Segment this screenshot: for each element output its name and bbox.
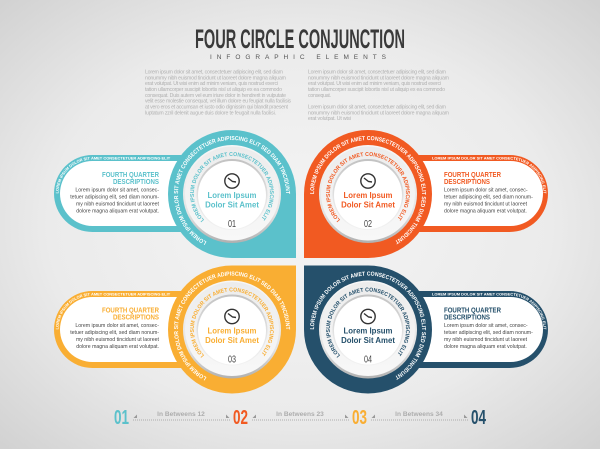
- number: 03: [228, 354, 236, 366]
- pill white interior: [60, 161, 230, 226]
- inner curved label: LOREM IPSUM DOLOR SIT AMET CONSECTETUER ADIPISCING ELIT: [326, 288, 410, 358]
- ring: [183, 145, 281, 243]
- description: my nibh euismod tincidunt ut laoreet: [444, 202, 528, 208]
- step 04: 04: [471, 407, 487, 429]
- heading: DESCRIPTIONS: [113, 312, 159, 322]
- heading: FOURTH QUARTER: [102, 306, 160, 314]
- icon: clock: [361, 309, 375, 324]
- description: dolore magna aliquam erat volutpat.: [444, 208, 527, 214]
- center label: Dolor Sit Amet: [341, 336, 395, 345]
- inner curved label: LOREM IPSUM DOLOR SIT AMET CONSECTETUER ADIPISCING ELIT: [190, 152, 274, 222]
- pill white interior: [60, 297, 230, 362]
- panel: 02 orange: [304, 130, 548, 258]
- title: FOUR CIRCLE CONJUNCTION: [195, 24, 405, 54]
- pill curved label: LOREM IPSUM DOLOR SIT AMET CONSECTETUER ADIPISCING ELIT: [432, 156, 546, 194]
- description: dolore magna aliquam erat volutpat.: [444, 344, 527, 350]
- outer curved label: LOREM IPSUM DOLOR SIT AMET CONSECTETUER ADIPISCING ELIT SED DIAM TINCIDUNT: [174, 136, 290, 245]
- pill: navy: [358, 291, 548, 368]
- heading: [102, 306, 160, 322]
- center label: Lorem Ipsum: [208, 326, 257, 336]
- text block: left intro column: at vero eros et accumsan et iusto odio dignissim qui blandit praesent: [145, 104, 289, 110]
- icon: clock: [225, 174, 239, 188]
- panel: 03 amber: [54, 266, 296, 394]
- icon: clock: [361, 174, 375, 188]
- label 23: In Betweens 23: [276, 411, 324, 418]
- icon: clock: [225, 309, 239, 324]
- text block: right intro column: nonummy nibh euismod tincidunt ut laoreet dolore magna aliquam: [308, 75, 449, 81]
- teardrop shape: [168, 130, 296, 258]
- description: Lorem ipsum dolor sit amet, consec-: [444, 188, 528, 194]
- description: Lorem ipsum dolor sit amet, consec-: [444, 323, 528, 329]
- teardrop shape: [304, 130, 432, 258]
- heading: FOURTH QUARTER: [444, 170, 502, 179]
- label 34: In Betweens 34: [395, 411, 443, 418]
- number: 02: [364, 219, 372, 230]
- ring: [319, 145, 417, 243]
- teardrop shape: [304, 266, 432, 394]
- text block: right intro column: nonummy nibh euismod tincidunt ut laoreet dolore magna aliquam: [308, 110, 449, 116]
- description: tetuer adipiscing elit, sed diam nonum-: [70, 330, 159, 336]
- heading: DESCRIPTIONS: [113, 177, 159, 186]
- text block: left intro column: nonummy nibh euismod tincidunt ut laoreet dolore magna aliquam: [145, 75, 286, 81]
- outer curved label: LOREM IPSUM DOLOR SIT AMET CONSECTETUER ADIPISCING ELIT SED DIAM TINCIDUNT: [310, 136, 426, 244]
- text block: right intro column: Lorem ipsum dolor sit amet, consectetuer adipiscing elit, sed diam: [308, 70, 446, 76]
- outer curved label: LOREM IPSUM DOLOR SIT AMET CONSECTETUER ADIPISCING ELIT SED DIAM TINCIDUNT: [310, 272, 426, 380]
- heading: [444, 306, 502, 322]
- description: my nibh euismod tincidunt ut laoreet: [76, 202, 160, 208]
- text block: right intro column: [308, 70, 449, 122]
- connector 34: [371, 414, 468, 420]
- text block: left intro column: velit esse molestie consequat, vel illum dolore eu feugiat nulla facilisis: [145, 99, 291, 105]
- pill curved label: LOREM IPSUM DOLOR SIT AMET CONSECTETUER ADIPISCING ELIT: [432, 292, 546, 330]
- inner curved label: LOREM IPSUM DOLOR SIT AMET CONSECTETUER ADIPISCING ELIT: [326, 152, 410, 222]
- description: tetuer adipiscing elit, sed diam nonum-: [70, 194, 159, 200]
- description: [70, 323, 160, 350]
- description: dolore magna aliquam erat volutpat.: [76, 208, 159, 214]
- heading: [102, 170, 160, 186]
- description: tetuer adipiscing elit, sed diam nonum-: [444, 194, 533, 200]
- panel: 04 navy: [304, 266, 548, 394]
- pill white interior: [373, 297, 543, 362]
- connector 23: [252, 414, 349, 420]
- heading: FOURTH QUARTER: [444, 306, 502, 314]
- ring: [183, 280, 281, 378]
- heading: FOURTH QUARTER: [102, 170, 160, 179]
- timeline: [114, 407, 487, 429]
- step 03: 03: [352, 407, 367, 429]
- text block: left intro column: [145, 70, 291, 116]
- heading: DESCRIPTIONS: [444, 177, 490, 186]
- outer curved label: LOREM IPSUM DOLOR SIT AMET CONSECTETUER ADIPISCING ELIT SED DIAM TINCIDUNT: [174, 272, 290, 380]
- step 02: 02: [233, 407, 248, 429]
- description: dolore magna aliquam erat volutpat.: [76, 344, 159, 350]
- pill: orange: [358, 155, 548, 232]
- description: Lorem ipsum dolor sit amet, consec-: [75, 188, 159, 194]
- pill white interior: [373, 161, 543, 226]
- connector 12: [133, 414, 230, 420]
- step 01: 01: [114, 407, 129, 429]
- description: [444, 323, 533, 350]
- description: [444, 188, 533, 214]
- text block: left intro column: luptatum zzril delenit augue duis dolore te feugait nulla facilisi.: [145, 110, 276, 116]
- pill: teal: [54, 155, 244, 232]
- inner curved label: LOREM IPSUM DOLOR SIT AMET CONSECTETUER ADIPISCING ELIT: [190, 288, 274, 358]
- panel: 01 teal: [54, 130, 296, 258]
- text block: right intro column: tation ullamcorper suscipit lobortis nisl ut aliquip ex ea commodo: [308, 87, 445, 93]
- teardrop shape: [168, 266, 296, 394]
- heading: [444, 170, 502, 186]
- pill: amber: [54, 291, 244, 368]
- label 12: In Betweens 12: [157, 411, 205, 418]
- text block: right intro column: Lorem ipsum dolor sit amet, consectetuer adipiscing elit, sed diam: [308, 104, 446, 110]
- center label: Dolor Sit Amet: [341, 200, 395, 210]
- center label: [205, 191, 259, 210]
- center label: Dolor Sit Amet: [205, 200, 259, 210]
- description: tetuer adipiscing elit, sed diam nonum-: [444, 330, 533, 336]
- center label: [205, 326, 259, 345]
- heading: DESCRIPTIONS: [444, 312, 490, 322]
- text block: left intro column: consequat. Duis autem vel eum iriure dolor in hendrerit in vulputate: [145, 93, 286, 99]
- text block: left intro column: tation ullamcorper suscipit lobortis nisl ut aliquip ex ea commodo: [145, 87, 282, 93]
- pill curved label: LOREM IPSUM DOLOR SIT AMET CONSECTETUER ADIPISCING ELIT: [56, 156, 170, 194]
- center label: Dolor Sit Amet: [205, 336, 259, 345]
- center label: [341, 326, 395, 345]
- number: 01: [228, 219, 236, 230]
- text block: right intro column: erat volutpat. Ut wisi enim ad minim veniam, quis nostrud exerci: [308, 81, 441, 87]
- text block: left intro column: Lorem ipsum dolor sit amet, consectetuer adipiscing elit, sed diam: [145, 70, 283, 76]
- text block: left intro column: erat volutpat. Ut wisi enim ad minim veniam, quis nostrud exerci: [145, 81, 278, 87]
- description: [70, 188, 160, 214]
- description: my nibh euismod tincidunt ut laoreet: [76, 337, 160, 343]
- center label: Lorem Ipsum: [344, 191, 393, 200]
- center label: Lorem Ipsum: [344, 326, 393, 336]
- description: Lorem ipsum dolor sit amet, consec-: [75, 323, 159, 329]
- text block: right intro column: erat volutpat. Ut wisi: [308, 116, 351, 122]
- pill curved label: LOREM IPSUM DOLOR SIT AMET CONSECTETUER ADIPISCING ELIT: [56, 292, 170, 330]
- subtitle: INFOGRAPHIC ELEMENTS: [210, 54, 387, 61]
- number: 04: [364, 354, 372, 366]
- center label: Lorem Ipsum: [208, 191, 257, 200]
- description: my nibh euismod tincidunt ut laoreet: [444, 337, 528, 343]
- center label: [341, 191, 395, 210]
- ring: [319, 280, 417, 378]
- text block: right intro column: consequat.: [308, 93, 331, 99]
